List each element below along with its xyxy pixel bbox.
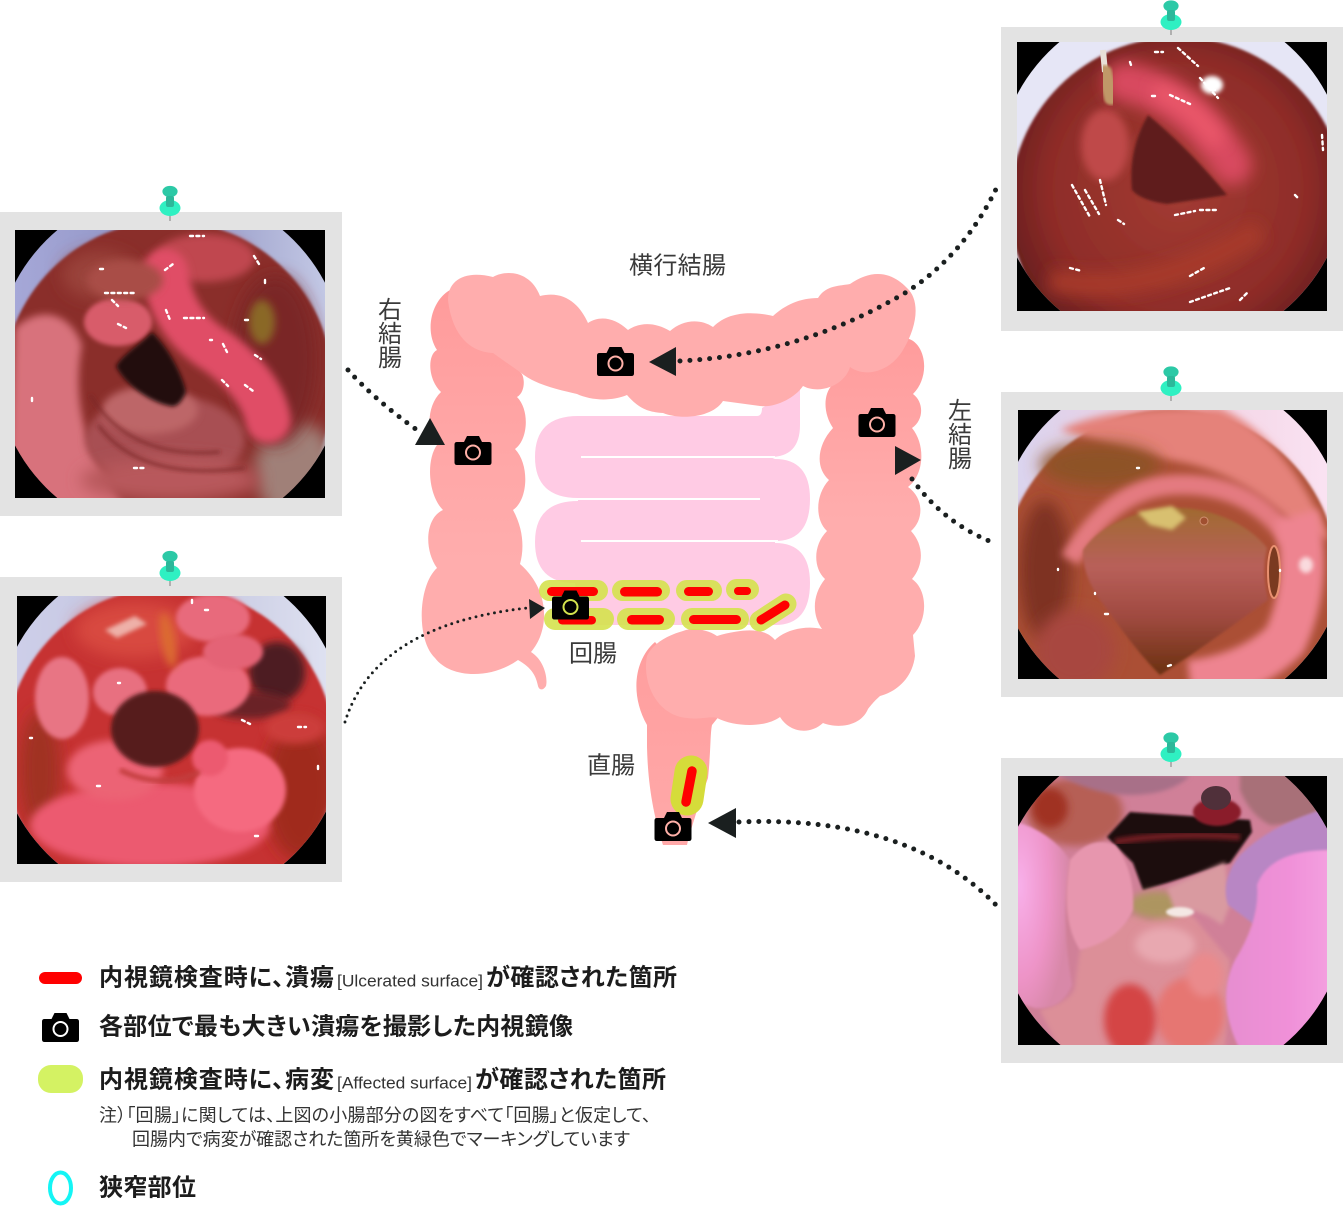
label: left colon: 結	[948, 422, 972, 449]
push pin	[160, 551, 180, 586]
push pin	[1160, 0, 1182, 35]
camera icon: right colon	[454, 436, 492, 465]
arrow: rectum photo to camera	[708, 808, 998, 907]
camera icon: rectum	[654, 812, 692, 841]
legend row: stricture: 狭窄部位	[99, 1174, 196, 1202]
push pin	[160, 186, 180, 221]
panel: transverse colon photo	[1001, 0, 1343, 331]
push pin	[1160, 366, 1182, 401]
rectum	[636, 642, 720, 845]
label: right colon: 腸	[378, 345, 402, 372]
photo frame	[0, 212, 342, 516]
ulcer marks	[547, 587, 785, 624]
photo frame	[0, 577, 342, 882]
camera icon: left colon	[858, 408, 896, 437]
sigmoid colon	[646, 628, 915, 731]
ascending colon and cecum	[422, 290, 546, 689]
endoscopic image	[15, 230, 325, 498]
endoscopic image	[1018, 410, 1327, 679]
photo frame	[1001, 392, 1343, 697]
legend note: 注）「回腸」に関しては、上図の小腸部分の図をすべて「回腸」と仮定して、	[99, 1106, 651, 1126]
label: transverse colon: 横行結腸	[629, 252, 726, 280]
transverse colon	[448, 273, 916, 417]
descending colon	[815, 338, 924, 640]
arrow: right colon photo to camera	[348, 370, 445, 445]
label: left colon: 腸	[948, 446, 972, 473]
lesion markings: rectum	[686, 771, 692, 802]
endoscopic image	[1018, 776, 1327, 1045]
panel: ileum photo	[0, 551, 342, 917]
endoscopic image	[17, 596, 326, 864]
panel: left colon photo	[1001, 366, 1343, 697]
legend row: affected surface: [Affected surface]	[337, 1074, 472, 1092]
legend	[38, 964, 677, 1204]
label: ileum: 回腸	[569, 640, 617, 668]
panel: rectum photo	[1000, 732, 1343, 1063]
legend row: ulcer: [Ulcerated surface]	[337, 972, 483, 990]
legend row: ulcer: 内視鏡検査時に、潰瘍	[99, 964, 334, 992]
label: right colon: 右	[378, 297, 402, 324]
label: right colon: 結	[378, 321, 402, 348]
lesion markings: ileum	[539, 579, 786, 630]
legend row: stricture	[50, 1172, 196, 1204]
endoscopic image	[1017, 42, 1327, 311]
legend row: ulcer	[39, 964, 677, 992]
legend row: affected surface	[38, 1065, 666, 1094]
label: rectum: 直腸	[587, 752, 635, 780]
photo frame	[1001, 758, 1343, 1063]
legend row: camera: 各部位で最も大きい潰瘍を撮影した内視鏡像	[99, 1012, 573, 1040]
arrow: ileum photo to camera	[345, 599, 545, 722]
push pin	[1160, 732, 1182, 767]
legend note: 回腸内で病変が確認された箇所を黄緑色でマーキングしています	[132, 1130, 630, 1150]
panel: right colon photo	[0, 186, 342, 551]
arrow: left colon photo to camera	[895, 446, 997, 544]
legend note	[99, 1106, 651, 1150]
legend row: ulcer: が確認された箇所	[486, 964, 677, 992]
small intestine	[535, 385, 810, 625]
photo frame	[1001, 27, 1343, 331]
label: left colon: 左	[948, 398, 972, 425]
legend row: affected surface: 内視鏡検査時に、病変	[99, 1066, 334, 1094]
camera icon: ileum	[552, 590, 589, 620]
colon illustration	[422, 273, 924, 845]
label: left colon	[948, 398, 972, 473]
camera icon: transverse colon	[597, 347, 634, 376]
affected surface bands	[539, 579, 786, 630]
label: right colon	[378, 297, 402, 372]
arrow: transverse colon photo to camera	[649, 185, 998, 376]
legend row: affected surface: が確認された箇所	[475, 1066, 666, 1094]
